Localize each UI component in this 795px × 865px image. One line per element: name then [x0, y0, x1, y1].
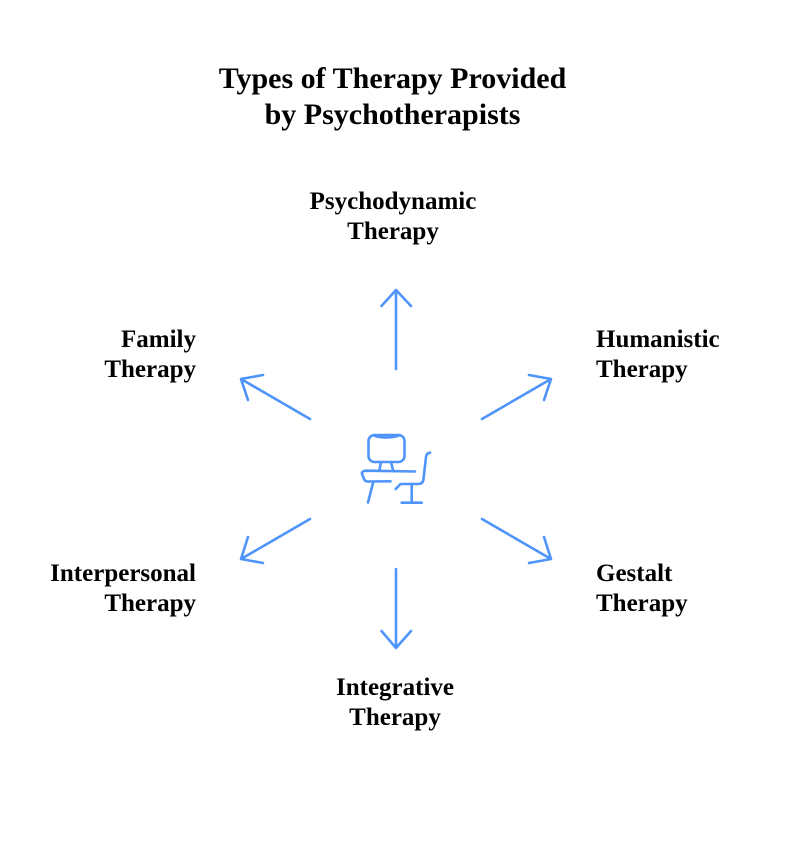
label: Family Therapy — [104, 326, 196, 383]
label: Integrative Therapy — [336, 674, 454, 731]
title — [219, 62, 567, 131]
label: Humanistic Therapy: Therapy — [596, 356, 688, 383]
label: Humanistic Therapy: Humanistic — [596, 326, 720, 353]
label: Family Therapy: Therapy — [104, 356, 196, 383]
label: Family Therapy: Family — [121, 326, 196, 353]
label: Interpersonal Therapy — [50, 560, 196, 617]
arrow: to Gestalt Therapy — [482, 519, 551, 563]
label: Interpersonal Therapy: Therapy — [104, 590, 196, 617]
arrow: to Family Therapy — [241, 375, 310, 419]
label: Gestalt Therapy — [596, 560, 688, 617]
label: Gestalt Therapy: Gestalt — [596, 560, 673, 587]
title: Types of Therapy Provided — [219, 62, 567, 95]
label: Psychodynamic Therapy — [310, 188, 476, 245]
arrow: to Humanistic Therapy — [482, 375, 551, 419]
label: Integrative Therapy: Integrative — [336, 674, 454, 701]
label: Interpersonal Therapy: Interpersonal — [50, 560, 196, 587]
label: Psychodynamic Therapy: Therapy — [347, 218, 439, 245]
label: Humanistic Therapy — [596, 326, 720, 383]
label: Gestalt Therapy: Therapy — [596, 590, 688, 617]
title: by Psychotherapists — [265, 98, 520, 131]
arrow: to Interpersonal Therapy — [241, 519, 310, 563]
label: Psychodynamic Therapy: Psychodynamic — [310, 188, 476, 215]
label: Integrative Therapy: Therapy — [349, 704, 441, 731]
arrow: up to Psychodynamic Therapy — [382, 290, 411, 369]
arrow: down to Integrative Therapy — [382, 569, 411, 648]
icon: computer desk and chair — [362, 435, 430, 503]
